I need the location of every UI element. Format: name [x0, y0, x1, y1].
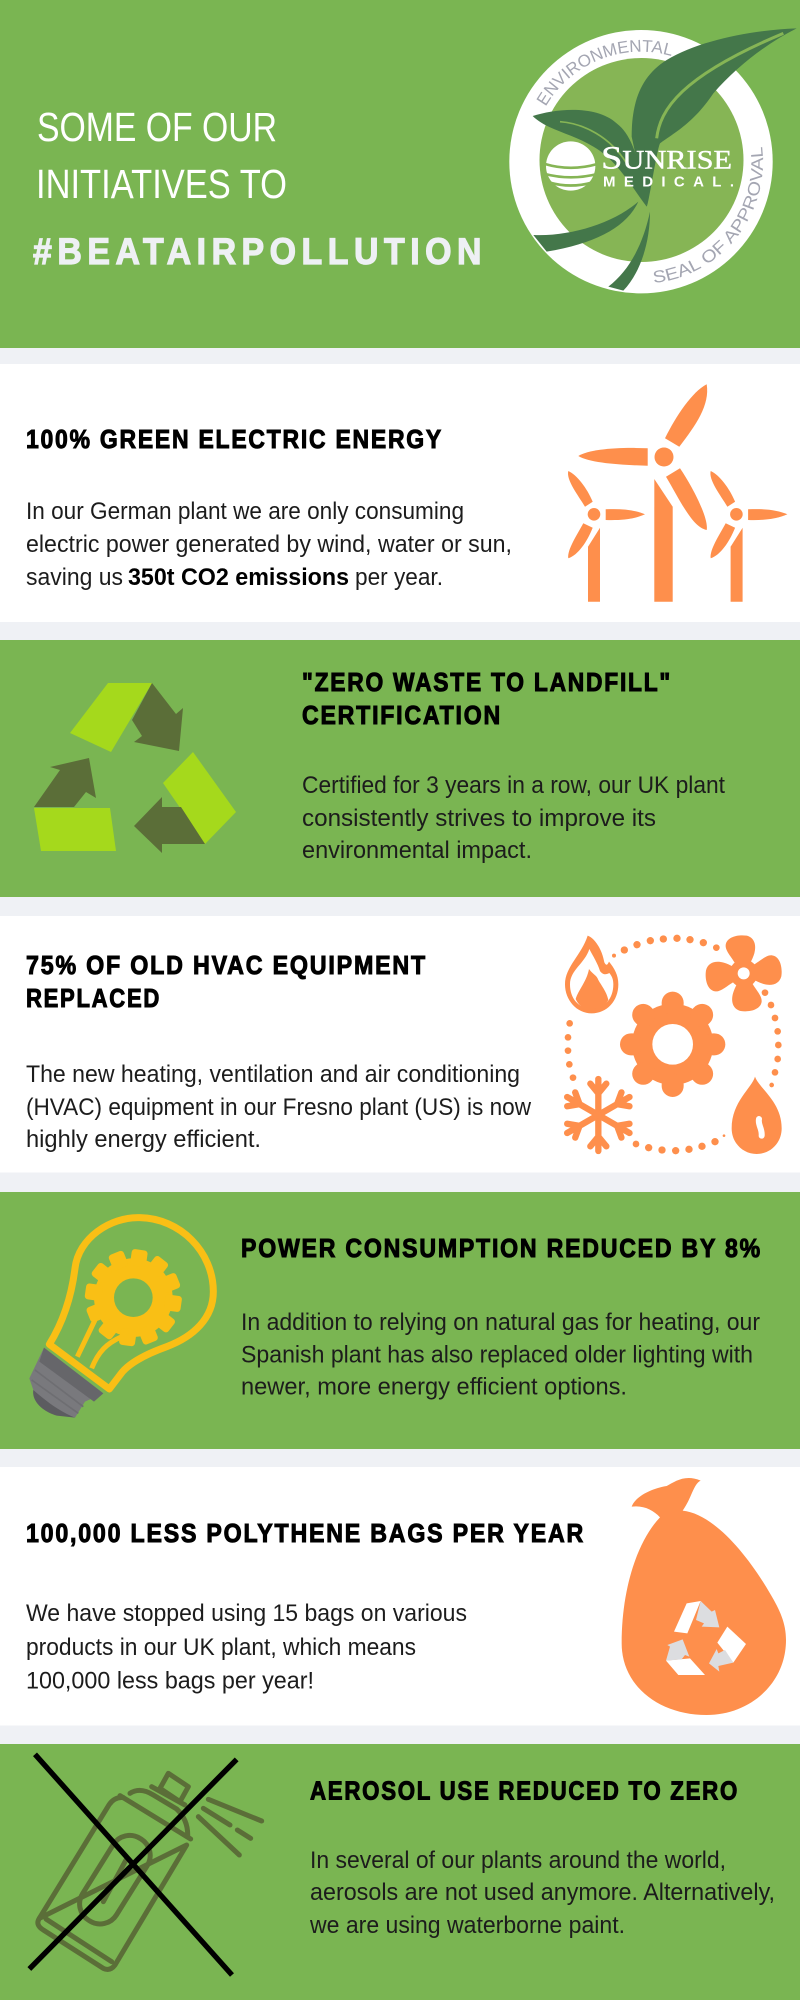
text block: In addition to relying on natural gas for heating, our [241, 1309, 760, 1336]
text block [26, 1600, 467, 1694]
icon: recycling bag [622, 1478, 786, 1715]
text block: consistently strives to improve its [302, 805, 656, 832]
text block: aerosols are not used anymore. Alternatively, [310, 1879, 775, 1906]
icon: wind turbines [568, 384, 787, 602]
heading: AEROSOL USE REDUCED TO ZERO [310, 1776, 739, 1806]
text block: The new heating, ventilation and air conditioning [26, 1061, 520, 1088]
text block: environmental impact. [302, 837, 532, 864]
panel: power consumption [0, 1192, 800, 1449]
title: #BEATAIRPOLLUTION [33, 231, 487, 272]
text block: per year. [355, 564, 443, 591]
icon: light bulb with gear [29, 1218, 213, 1418]
text block: Spanish plant has also replaced older lighting with [241, 1342, 753, 1368]
text block [26, 498, 512, 591]
text block: In our German plant we are only consuming [26, 498, 464, 525]
panel: polythene bags [0, 1467, 800, 1726]
icon: HVAC cycle [563, 935, 782, 1154]
logo: Sunrise Medical environmental seal of approval: SEAL OF APPROVAL [654, 147, 764, 282]
logo: Sunrise Medical environmental seal of approval [509, 28, 796, 294]
text block: products in our UK plant, which means [26, 1634, 416, 1661]
heading: 100,000 LESS POLYTHENE BAGS PER YEAR [26, 1518, 585, 1548]
icon: dotted ring [565, 935, 782, 1154]
panel: header [0, 0, 800, 348]
text block [241, 1309, 760, 1400]
icon: black cross [29, 1754, 237, 1975]
text block: Certified for 3 years in a row, our UK plant [302, 772, 725, 799]
text block: (HVAC) equipment in our Fresno plant (US) is now [26, 1094, 532, 1121]
text block [26, 1061, 532, 1153]
heading: 75% OF OLD HVAC EQUIPMENT [26, 950, 427, 980]
panel: zero waste to landfill [0, 640, 800, 897]
text block: In several of our plants around the world, [310, 1847, 726, 1874]
icon: fan [706, 935, 782, 1011]
text block: highly energy efficient. [26, 1126, 261, 1153]
icon: gear [620, 992, 725, 1097]
heading: 100% GREEN ELECTRIC ENERGY [26, 424, 443, 454]
title: INITIATIVES TO [36, 161, 287, 207]
logo: Sunrise Medical environmental seal of approval: SUNRISE [601, 140, 732, 176]
title: SOME OF OUR [37, 104, 277, 150]
text block: electric power generated by wind, water or sun, [26, 531, 512, 558]
text block: saving us [26, 564, 123, 591]
text block: 350t CO2 emissions [128, 564, 349, 591]
panel: green electric energy [0, 364, 800, 622]
text block: We have stopped using 15 bags on various [26, 1600, 467, 1627]
logo: Sunrise Medical environmental seal of approval: MEDICAL. [603, 174, 734, 190]
icon: snowflake [563, 1079, 634, 1151]
heading: "ZERO WASTE TO LANDFILL" [302, 667, 672, 697]
panel: HVAC equipment [0, 916, 800, 1172]
icon: crossed-out aerosol can [29, 1754, 262, 1975]
text block: 100,000 less bags per year! [26, 1668, 314, 1694]
icon: flame [565, 936, 618, 1013]
text block: we are using waterborne paint. [309, 1912, 625, 1939]
text block: newer, more energy efficient options. [241, 1374, 627, 1400]
text block [309, 1847, 775, 1939]
panel: aerosol use [0, 1744, 800, 2000]
heading [302, 667, 672, 730]
heading [26, 950, 427, 1013]
logo: Sunrise Medical environmental seal of approval: ENVIRONMENTAL [536, 40, 672, 106]
text block [302, 772, 725, 864]
icon: recycle arrows [34, 683, 236, 853]
icon: aerosol can [38, 1773, 262, 1969]
title [33, 104, 487, 272]
icon: water drop [732, 1077, 782, 1154]
heading: CERTIFICATION [302, 700, 502, 730]
heading: REPLACED [26, 983, 161, 1013]
